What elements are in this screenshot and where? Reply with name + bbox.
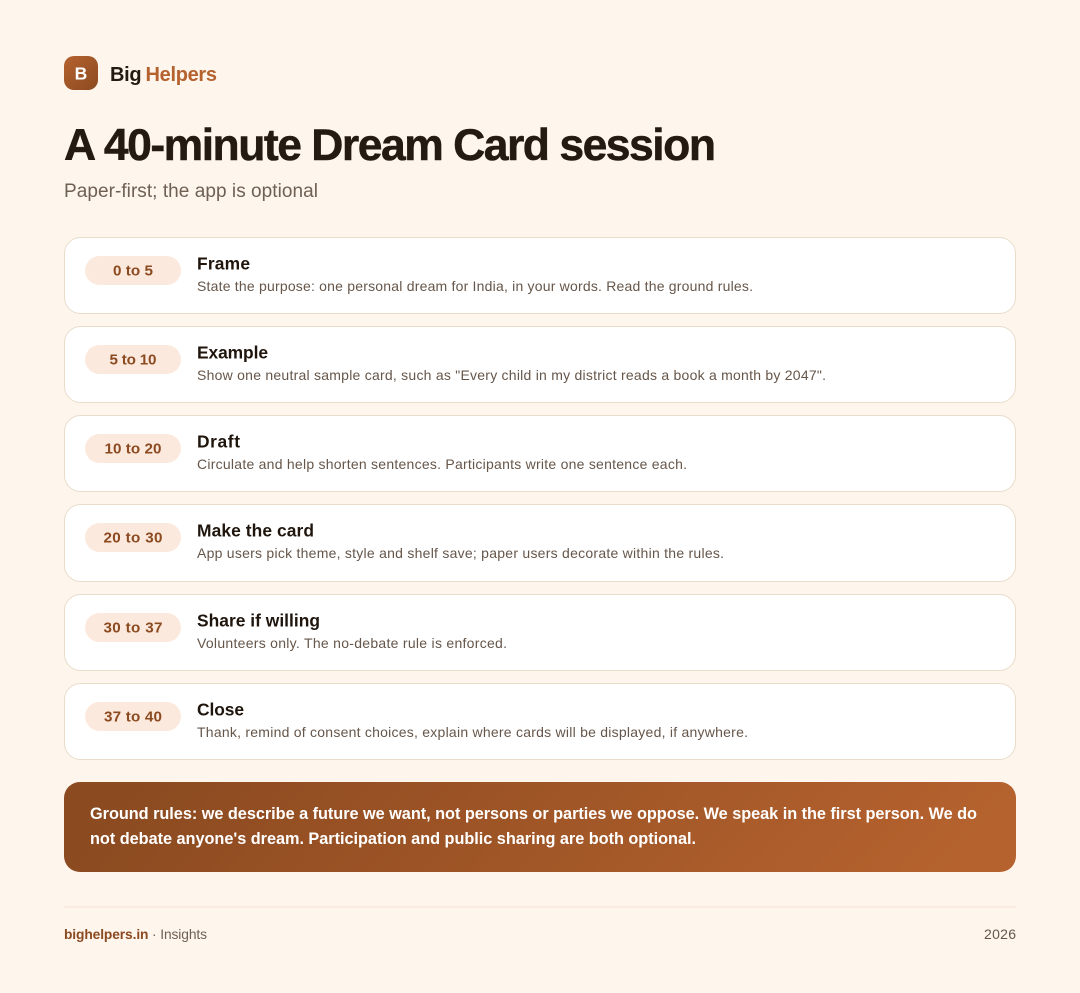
brand logo and name (64, 56, 217, 90)
step description: State the purpose: one personal dream for India, in your words. Read the ground rules. (197, 278, 753, 294)
time pill: 0 to 5 (85, 256, 181, 285)
footer source: bighelpers.in · Insights (64, 927, 207, 942)
panel: Make the card (64, 504, 1016, 582)
panel: Share if willing (64, 594, 1016, 670)
step description: Circulate and help shorten sentences. Participants write one sentence each. (197, 456, 687, 472)
step description: App users pick theme, style and shelf save; paper users decorate within the rules. (197, 545, 724, 561)
time pill: 5 to 10 (85, 345, 181, 374)
panel: Close (64, 684, 1016, 760)
footer year: 2026 (984, 926, 1016, 942)
callout: ground rules (64, 782, 1016, 872)
subtitle: Paper-first; the app is optional (64, 181, 318, 202)
step description: Show one neutral sample card, such as "Every child in my district reads a book a month by 2047". (197, 367, 826, 383)
time pill: 20 to 30 (85, 523, 181, 552)
step description: Volunteers only. The no-debate rule is enforced. (197, 635, 507, 651)
callout: ground rules: Ground rules: we describe a future we want, not persons or parties we oppose. We speak in the first person. We do (90, 805, 977, 823)
step title: Share if willing (197, 610, 320, 630)
icon: B logo: B (75, 64, 87, 84)
time pill: 37 to 40: 37 to 40 (104, 708, 162, 726)
time pill: 10 to 20: 10 to 20 (104, 440, 162, 458)
time pill: 37 to 40 (85, 702, 181, 731)
step title: Close (197, 700, 244, 720)
time pill: 20 to 30: 20 to 30 (104, 530, 162, 546)
icon: B logo (64, 56, 98, 90)
step description: Thank, remind of consent choices, explain where cards will be displayed, if anywhere. (197, 724, 748, 740)
time pill: 10 to 20 (85, 434, 181, 463)
time pill: 0 to 5: 0 to 5 (113, 262, 154, 280)
step title: Example (197, 342, 268, 362)
step title: Frame (197, 254, 250, 274)
footer (64, 926, 1016, 942)
callout: ground rules: not debate anyone's dream. Participation and public sharing are both optional. (90, 830, 696, 848)
time pill: 30 to 37 (85, 613, 181, 642)
panel: Draft (64, 416, 1016, 492)
step title: Draft (197, 432, 240, 452)
time pill: 30 to 37: 30 to 37 (104, 620, 162, 636)
step title: Make the card (197, 520, 314, 540)
panel: Frame (64, 238, 1016, 314)
panel: Example (64, 326, 1016, 402)
brand name: Big Helpers (110, 64, 217, 86)
time pill: 5 to 10: 5 to 10 (110, 352, 156, 368)
title: A 40-minute Dream Card session (64, 121, 716, 170)
